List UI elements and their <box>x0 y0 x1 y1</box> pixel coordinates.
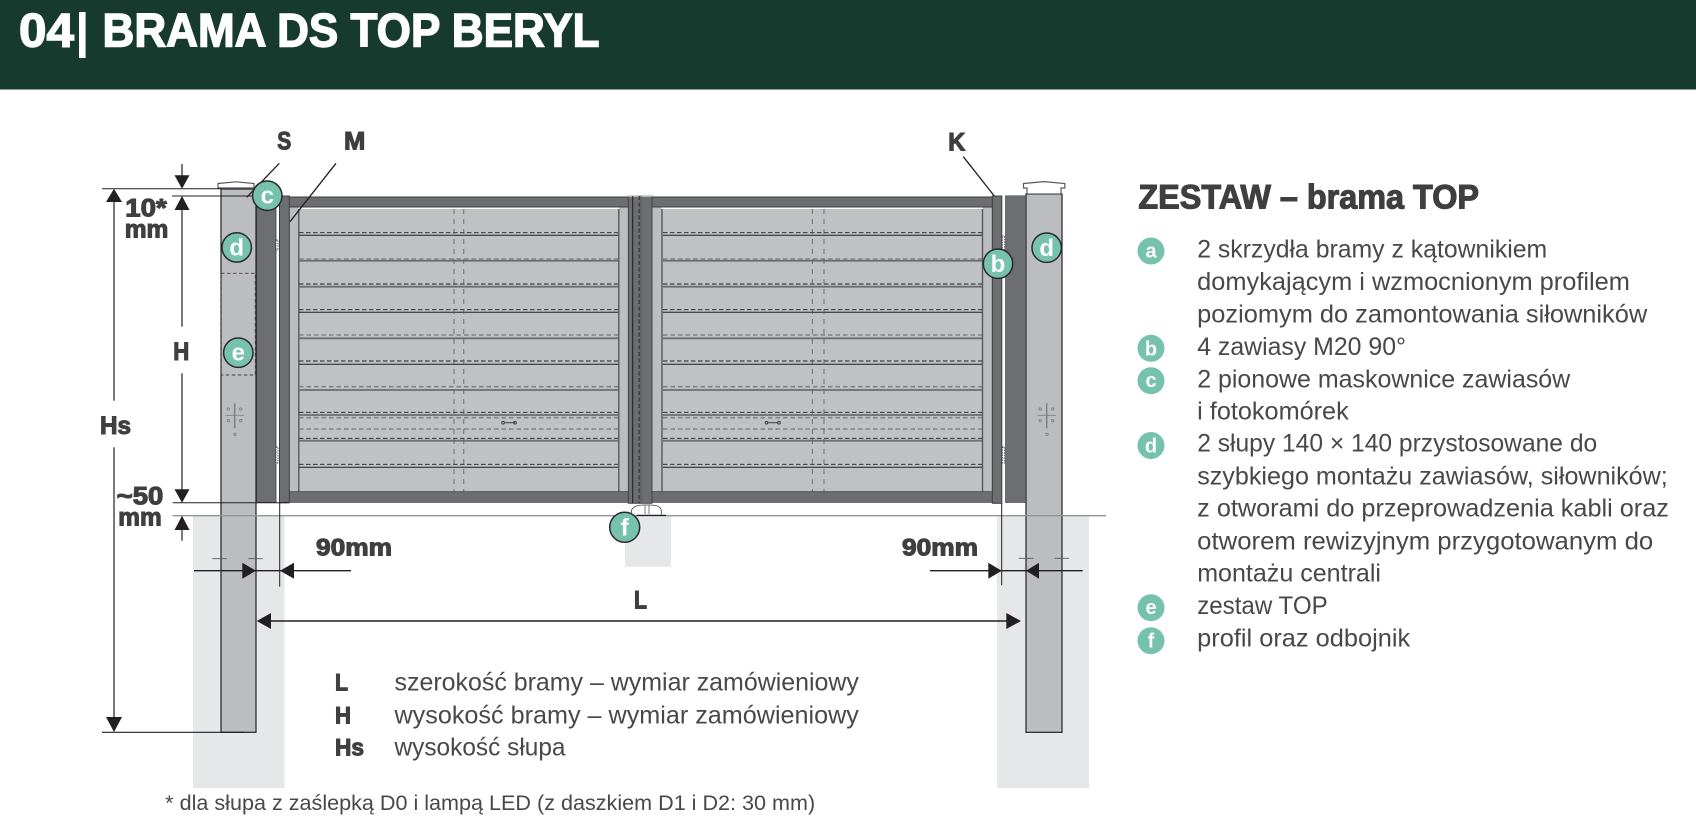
handles <box>502 421 780 424</box>
left cover column <box>257 196 276 502</box>
top rail <box>289 197 992 207</box>
callout e: e <box>232 340 245 366</box>
right post <box>1024 182 1065 732</box>
reference lines <box>102 157 1002 732</box>
dimensions legend <box>335 669 859 762</box>
item d: 2 słupy 140 × 140 przystosowane do <box>1197 430 1597 458</box>
label ~50 mm: mm <box>118 504 162 532</box>
dimensions legend: szerokość bramy – wymiar zamówieniowy <box>394 669 859 697</box>
footnote: * dla słupa z zaślepką D0 i lampą LED (z daszkiem D1 i D2: 30 mm) <box>165 792 815 815</box>
item c: c <box>1145 370 1157 392</box>
item e: zestaw TOP <box>1197 592 1328 620</box>
concrete foundations <box>193 516 1089 788</box>
item e: e <box>1145 597 1157 619</box>
right wing infill <box>662 209 982 492</box>
item e <box>1138 592 1328 621</box>
bottom rail <box>289 492 992 502</box>
item d: montażu centrali <box>1197 560 1381 588</box>
callout f: f <box>621 514 630 542</box>
dimension H arrow <box>174 164 190 541</box>
left wing infill <box>299 209 618 492</box>
callout d left: d <box>229 234 244 262</box>
item d: z otworami do przeprowadzenia kabli oraz <box>1197 495 1669 523</box>
infill slat lines, left and right wing <box>299 209 982 492</box>
label ~50 mm: ~50 <box>117 482 163 510</box>
item c: i fotokomórek <box>1197 398 1349 426</box>
dimensions legend: wysokość bramy – wymiar zamówieniowy <box>393 701 859 729</box>
callout e <box>224 338 253 367</box>
item d: d <box>1145 436 1157 458</box>
right post mount icon <box>1037 403 1056 435</box>
dimension Hs arrow <box>106 189 122 732</box>
dimensions legend: L <box>335 670 348 697</box>
title: BRAMA DS TOP BERYL <box>102 4 600 57</box>
item d: otworem rewizyjnym przygotowanym do <box>1197 527 1653 555</box>
callout d right <box>1032 233 1061 262</box>
header banner <box>0 0 1696 90</box>
callout d left <box>222 233 251 262</box>
item a: domykającym i wzmocnionym profilem <box>1197 268 1630 296</box>
item d <box>1138 430 1669 588</box>
label 10* mm: 10* <box>125 195 167 223</box>
callout c: c <box>261 182 274 210</box>
left post cap <box>218 182 254 188</box>
label K: K <box>948 128 965 156</box>
left gate stile <box>280 196 289 503</box>
label S: S <box>277 128 291 156</box>
dimension L <box>257 586 1021 629</box>
set list <box>1138 236 1669 654</box>
callout b: b <box>991 251 1005 278</box>
dimension L: L <box>634 586 647 614</box>
dimensions legend: Hs <box>335 735 364 762</box>
item a: a <box>1145 240 1157 262</box>
right gate stile <box>992 196 1002 503</box>
label 10* mm: mm <box>125 216 168 244</box>
label 10* mm <box>125 195 168 244</box>
stile edge lines <box>299 209 982 492</box>
item f: f <box>1148 631 1155 653</box>
right cover column <box>1005 195 1026 503</box>
callout b <box>983 249 1013 278</box>
label H: H <box>173 338 189 366</box>
left post <box>218 182 256 732</box>
centre post <box>628 195 652 503</box>
item f: profil oraz odbojnik <box>1197 625 1411 653</box>
callout d right: d <box>1039 235 1054 262</box>
item a: 2 skrzydła bramy z kątownikiem <box>1197 236 1547 264</box>
dimensions legend: H <box>335 702 351 729</box>
dimension 90mm right: 90mm <box>902 534 978 562</box>
gate stop <box>631 504 666 515</box>
gate <box>276 195 1004 503</box>
label Hs: Hs <box>100 412 131 440</box>
set heading: ZESTAW – brama TOP <box>1138 178 1479 216</box>
left post dashed zone <box>221 273 255 375</box>
callout f <box>610 512 640 542</box>
hinges <box>276 236 1004 463</box>
item b: b <box>1145 338 1157 360</box>
item a: poziomym do zamontowania siłowników <box>1197 301 1648 329</box>
label M: M <box>344 128 365 156</box>
dimension 90mm right <box>902 534 1083 579</box>
light stiles <box>289 207 992 492</box>
dimensions legend: wysokość słupa <box>394 734 566 762</box>
dimension 90mm left <box>194 534 392 579</box>
item a <box>1138 236 1648 329</box>
left post mount icon <box>225 403 244 435</box>
ground line <box>173 515 1106 517</box>
title: 04 <box>19 4 74 57</box>
dimension 90mm left: 90mm <box>316 534 392 562</box>
callout c <box>253 181 282 210</box>
item c <box>1138 365 1571 426</box>
right post cap <box>1024 182 1065 194</box>
label ~50 mm <box>117 482 163 532</box>
item d: szybkiego montażu zawiasów, siłowników; <box>1197 462 1668 490</box>
item c: 2 pionowe maskownice zawiasów <box>1197 365 1571 393</box>
item b: 4 zawiasy M20 90° <box>1197 333 1406 361</box>
